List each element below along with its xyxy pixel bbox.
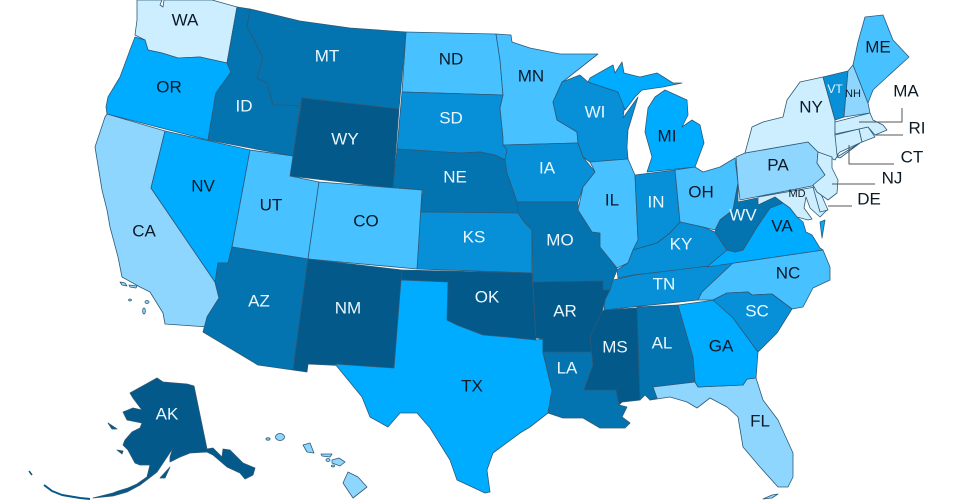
state: SC [713,292,792,352]
state: MI upper and lower peninsulas: MI [658,126,676,146]
state: CA [95,114,219,327]
state: GA [678,300,758,387]
state: LA: LA [557,358,578,378]
state: NC: NC [776,264,800,282]
state: MO: MO [546,230,574,250]
state: VT: VT [827,82,843,96]
state: WI [553,75,638,162]
state: NE [393,149,518,213]
state: MI upper and lower peninsulas [588,62,704,172]
state: MT: MT [315,46,339,66]
state: ID [208,7,300,156]
state: NJ [813,152,902,200]
state: KS [417,212,532,273]
state: AZ [203,247,308,370]
state: NH: NH [845,88,861,100]
state: CT [835,129,923,166]
state: SC: SC [745,302,769,320]
state: TX: TX [461,376,483,396]
state: TN [604,263,733,310]
state: MD: MD [788,188,806,200]
state: WA: WA [172,10,199,30]
state: GA: GA [709,336,734,356]
state: TN: TN [653,274,675,294]
state: DE: DE [857,190,881,208]
state: OR: OR [156,78,182,96]
state: UT [232,150,319,259]
state: RI: RI [908,118,926,138]
state: MS: MS [602,338,628,356]
state: MN: MN [518,66,544,86]
state: ID: ID [236,96,252,116]
state: OK [401,270,536,340]
state: WA [135,0,237,63]
state: MN [496,34,598,145]
state: AL: AL [652,334,672,352]
state: ND [402,32,503,95]
state: MO [517,202,617,290]
state: IN: IN [648,192,664,212]
state: LA [543,352,630,428]
state: WV: WV [729,206,757,224]
state: NE: NE [443,168,467,186]
state: OR [106,37,231,140]
state: CO: CO [353,212,379,230]
state: KS: KS [463,228,485,246]
state: UT: UT [260,196,282,214]
state: WV [715,183,783,252]
state: IN [633,170,680,250]
state: NJ: NJ [882,168,902,188]
state: NV: NV [191,176,215,196]
state: DE [813,185,881,212]
state: IL: IL [605,190,619,210]
state: FL [650,378,793,499]
state: VA: VA [771,216,793,236]
state: FL: FL [750,412,770,430]
state: OK: OK [475,288,500,306]
state: KY: KY [670,234,692,254]
state: AR: AR [553,302,577,320]
state: SD: SD [439,108,463,128]
state: CA: CA [132,222,156,240]
state: VA [707,203,825,267]
state: TX [335,280,552,493]
state: IL [578,159,638,268]
state: RI [859,118,926,142]
state: NM [293,259,402,372]
state: ME [853,15,909,103]
state: MA [835,82,919,135]
state: CT: CT [901,148,923,166]
state: AK [29,378,255,499]
state: AZ: AZ [248,292,270,310]
state: WY: WY [331,130,359,148]
state: WI: WI [585,102,605,122]
state: NV [151,131,250,282]
state: HI [266,434,367,498]
state: NC [698,250,830,309]
state: AR [533,281,610,352]
state: OH [675,158,738,230]
state: MS [584,308,640,405]
state: VT [823,71,848,120]
state: SD [397,92,507,160]
state: MD [758,187,827,220]
state: ME: ME [865,38,891,56]
state: PA: PA [767,156,789,174]
state: IA: IA [539,158,556,178]
state: IA [503,143,595,202]
state: NY: NY [799,98,823,116]
state: CO [308,182,422,269]
state: MT [247,9,406,109]
state: KY [617,222,727,278]
state: NM: NM [335,298,361,318]
state: AK: AK [156,404,179,424]
state: ND: ND [439,50,463,68]
state: MA: MA [893,82,919,100]
state: WY [290,98,399,188]
state: NH [844,65,870,117]
state: NY [745,77,860,160]
state: OH: OH [688,182,714,202]
state: PA [736,142,825,200]
state: AL [637,305,695,400]
